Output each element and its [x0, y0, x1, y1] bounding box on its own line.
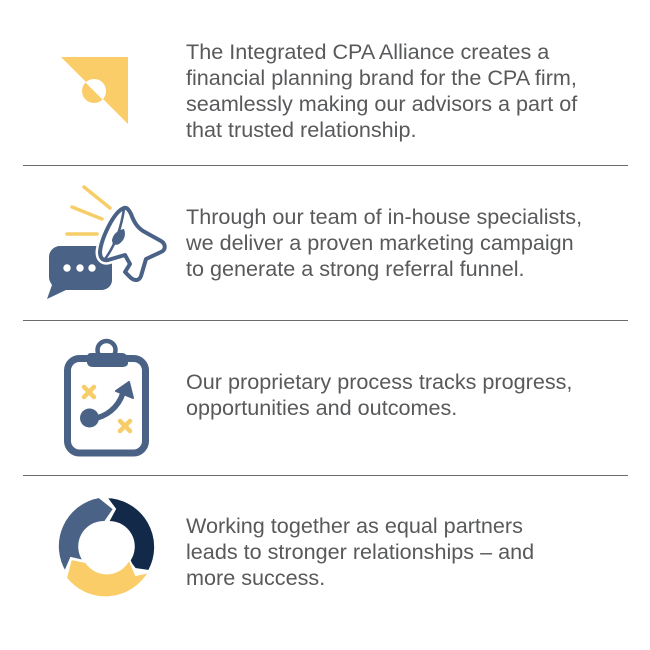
text block: equal partners: more success. — [186, 565, 325, 590]
text block: marketing campaign — [186, 204, 582, 281]
text block: CPA brand: that trusted relationship. — [186, 117, 416, 142]
text block: marketing campaign: to generate a strong referral funnel. — [186, 256, 525, 281]
text block: CPA brand: financial planning brand for the CPA firm, — [186, 65, 577, 90]
text block: proprietary process — [186, 369, 572, 420]
text block: equal partners: Working together as equal partners — [186, 513, 523, 538]
text block: CPA brand: seamlessly making our advisors a part of — [186, 91, 577, 116]
text block: CPA brand: The Integrated CPA Alliance creates a — [186, 39, 549, 64]
text block: proprietary process: opportunities and outcomes. — [186, 395, 457, 420]
text block: marketing campaign: we deliver a proven marketing campaign — [186, 230, 574, 255]
text block: equal partners — [186, 513, 534, 590]
text block: CPA brand — [186, 39, 578, 142]
text block: marketing campaign: Through our team of in-house specialists, — [186, 204, 582, 229]
text block: equal partners: leads to stronger relationships – and — [186, 539, 534, 564]
text block: proprietary process: Our proprietary process tracks progress, — [186, 369, 572, 394]
